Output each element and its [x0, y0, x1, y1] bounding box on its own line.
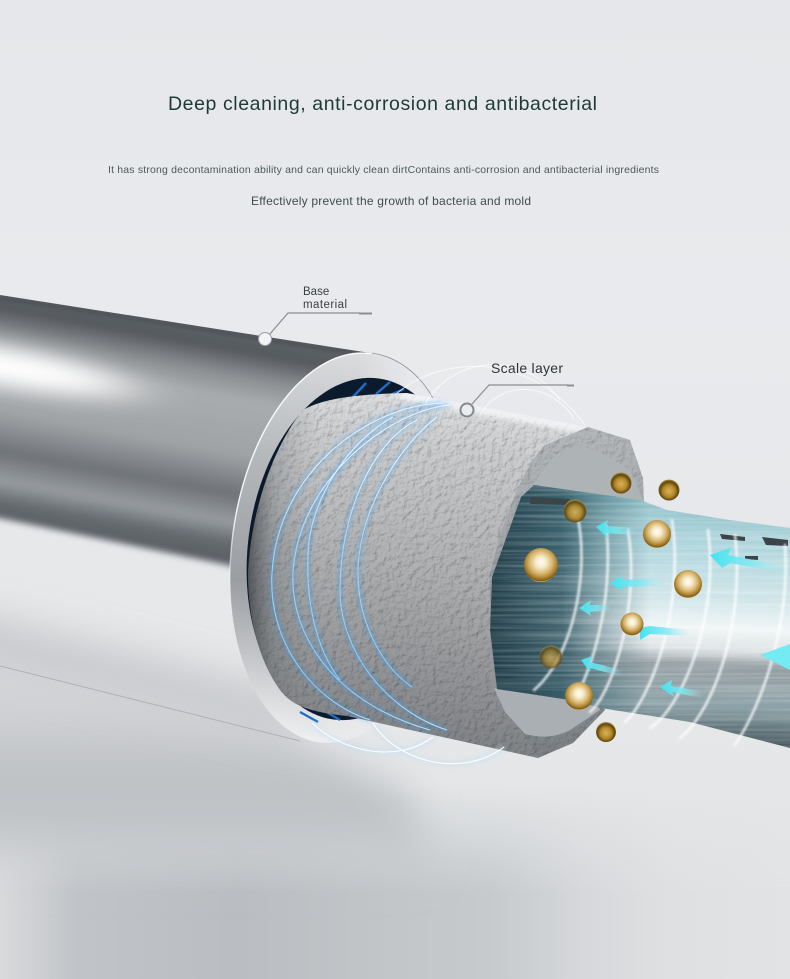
cyan flow arrows: [579, 520, 790, 698]
scale layer tube: [248, 393, 585, 758]
pipe white highlight: [0, 323, 136, 409]
blue cleaning rings glow: [272, 403, 450, 730]
flange thin edge: [372, 353, 434, 400]
blue cleaning rings: [272, 403, 450, 730]
blue hole streaks: [300, 382, 404, 722]
floor shading below pipe line: [0, 590, 440, 890]
brushed floor: [0, 811, 646, 979]
callout: scale layer: Scale layer: [491, 360, 563, 376]
callout: base material: [258, 286, 372, 346]
flange ring: [207, 339, 483, 757]
base material pipe: [0, 295, 370, 570]
callout: scale layer: [460, 360, 574, 416]
tube surface texture: [250, 393, 574, 758]
end rim: [490, 427, 644, 758]
title: Deep cleaning, anti-corrosion and antibacterial: [168, 93, 597, 115]
description line 1: It has strong decontamination ability and can quickly clean dirtContains anti-corrosion and antibacterial ingredients: [108, 164, 659, 176]
pipe hole: [226, 364, 486, 734]
description line 2: Effectively prevent the growth of bacteria and mold: [251, 194, 531, 208]
dark specks: [530, 497, 788, 560]
inner cavity top: [534, 446, 644, 502]
white flow arcs: [534, 518, 786, 745]
streak texture: [485, 480, 790, 760]
faint white outer rings: [395, 365, 585, 425]
inner cavity bottom: [494, 688, 600, 737]
tube top glow: [400, 392, 590, 428]
callout: base material: Base: [303, 286, 329, 298]
gold balls: [524, 472, 702, 742]
lower halo arcs: [312, 723, 504, 764]
callout: base material: material: [303, 299, 347, 311]
inner teal tube: [485, 480, 790, 760]
tube shadow on left: [248, 410, 305, 692]
pipe top edge shade: [0, 295, 370, 358]
lower halo arcs glow: [312, 723, 504, 764]
